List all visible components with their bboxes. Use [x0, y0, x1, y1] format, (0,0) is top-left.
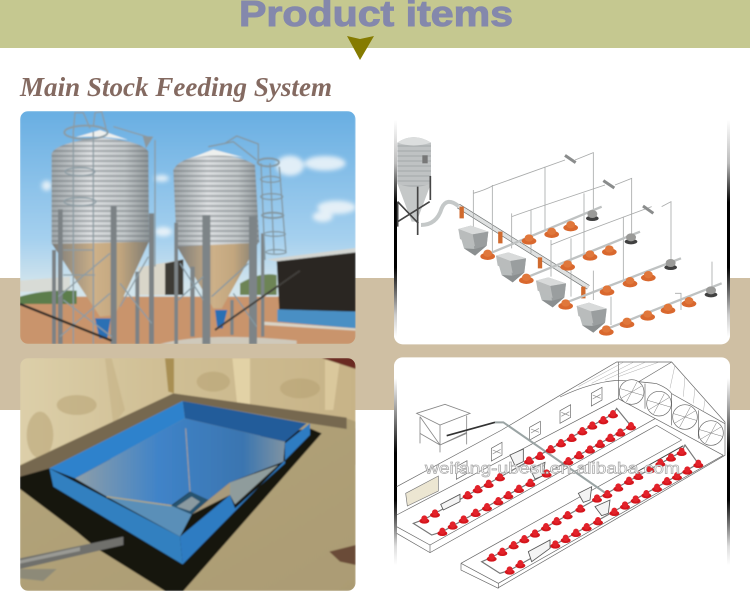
section heading: Main Stock Feeding System — [19, 72, 332, 102]
exhaust fans — [619, 380, 723, 445]
feeder cups — [480, 210, 717, 336]
conveyor hose and main pipe — [421, 202, 588, 298]
feed hopper — [417, 404, 470, 452]
floor — [20, 414, 356, 591]
hoppers — [458, 226, 607, 333]
feed lines — [490, 207, 722, 328]
watermark: weifang-ubest.en.alibaba.com — [424, 461, 680, 478]
air inlet grille — [406, 476, 438, 506]
silo left — [52, 112, 155, 344]
red feeder cups — [419, 410, 703, 575]
icon: down arrow — [347, 36, 374, 60]
hoppers on line — [441, 449, 610, 562]
panel: feeding system diagram — [394, 114, 730, 344]
panel: feed hopper photo — [20, 358, 356, 591]
pit — [20, 428, 322, 591]
building — [263, 248, 356, 331]
small silo — [397, 137, 431, 235]
pipes — [447, 422, 608, 495]
roof hatching — [578, 362, 705, 412]
header band — [0, 0, 750, 48]
panel: silo photo — [20, 111, 356, 344]
wires — [473, 153, 712, 325]
silo right — [173, 136, 286, 344]
panel: poultry house diagram — [394, 357, 730, 588]
tan background band — [0, 278, 750, 410]
feeder tracks — [413, 408, 698, 573]
house outline — [397, 362, 725, 588]
slanted bars — [565, 155, 653, 213]
side windows — [456, 387, 602, 479]
pipe — [20, 537, 123, 581]
blue trough — [49, 401, 310, 564]
